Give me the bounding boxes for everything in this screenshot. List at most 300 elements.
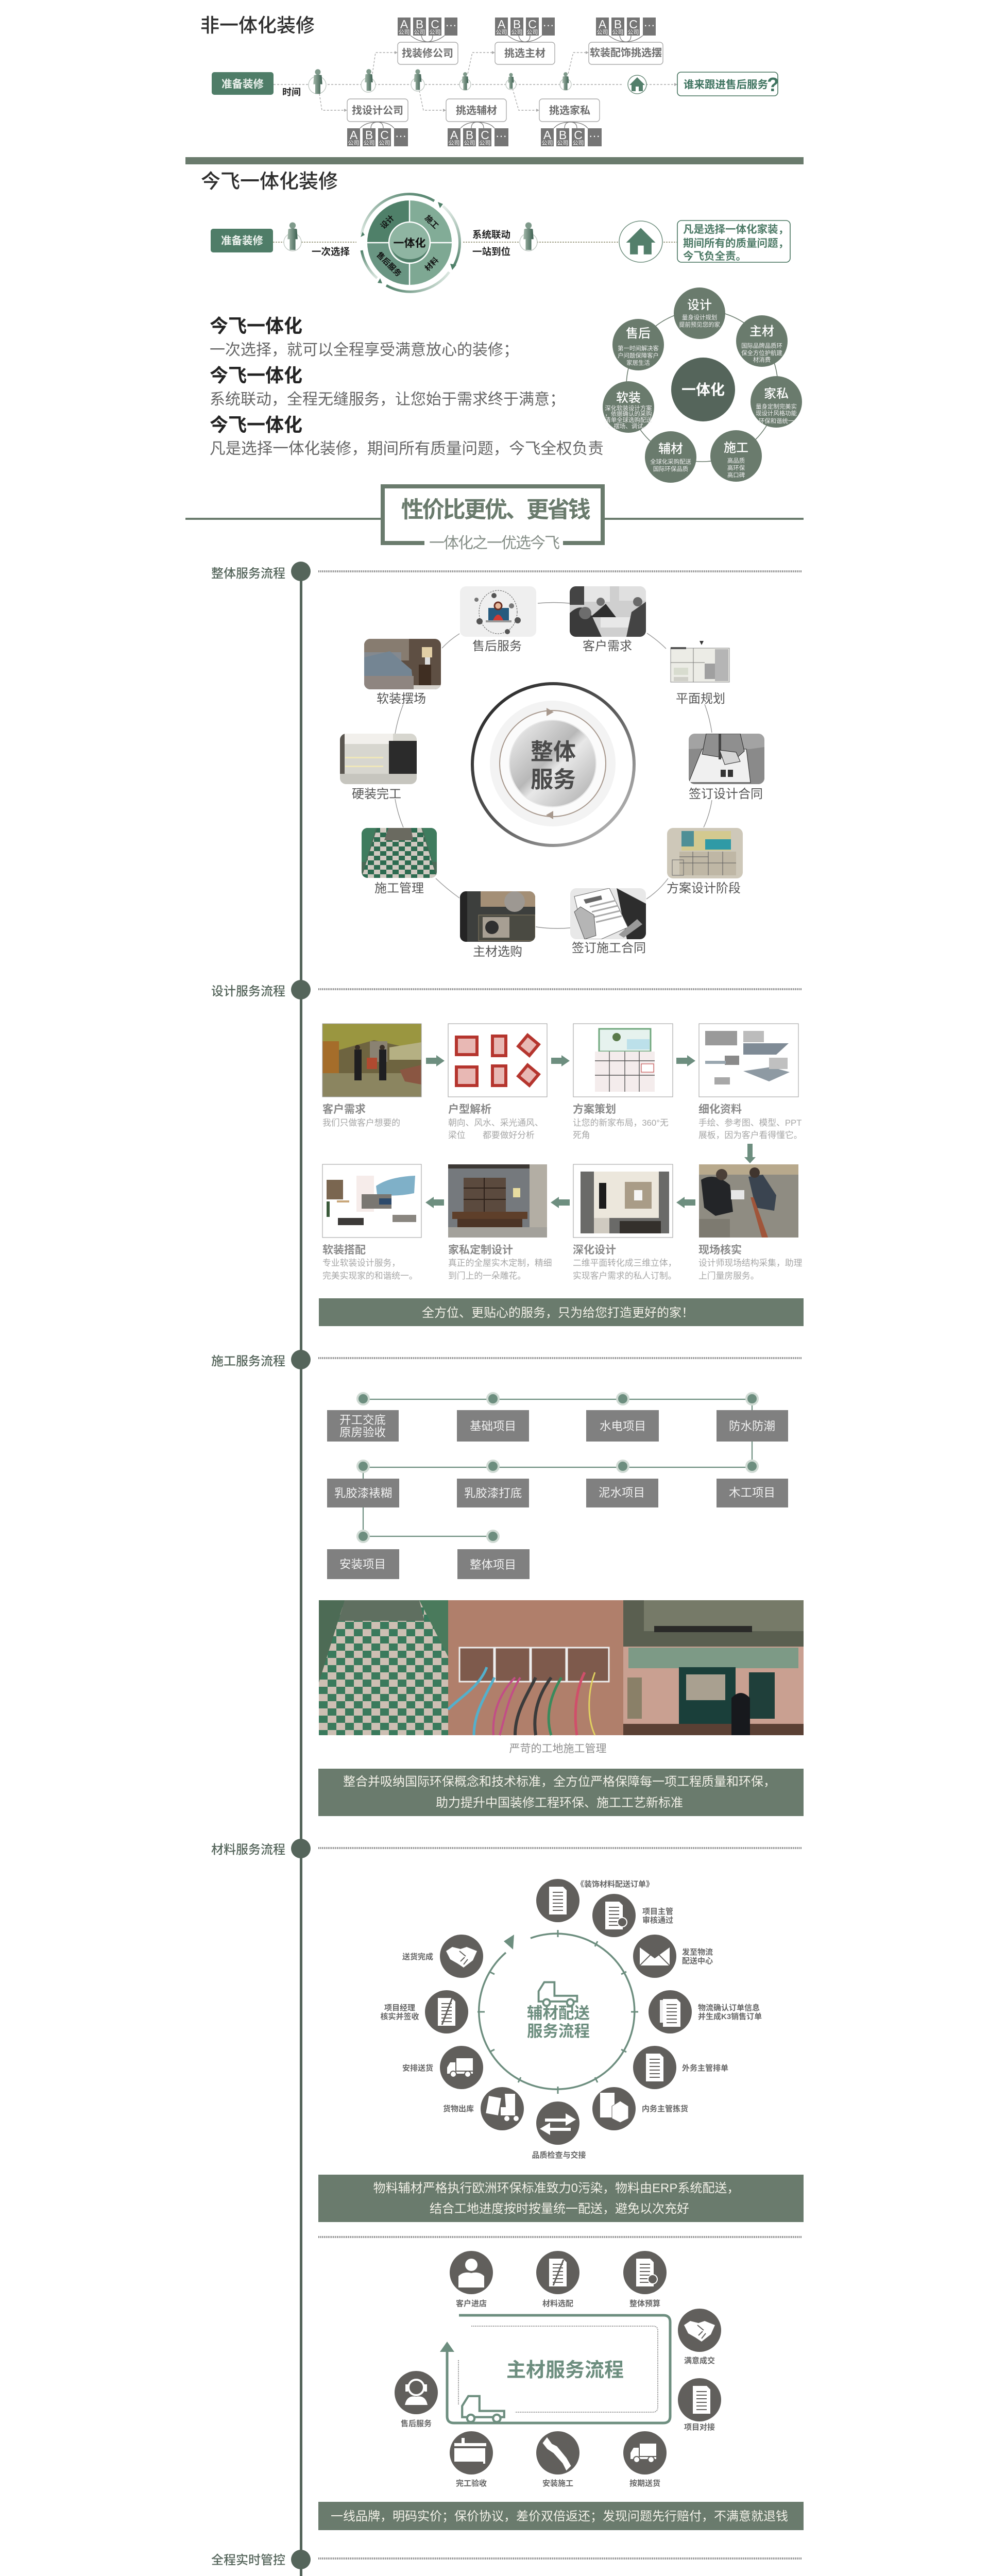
banner: better home xyxy=(319,1298,804,1326)
banner subtitle: 一体化之一优选今飞 xyxy=(429,535,559,552)
step: site verification: 现场核实 xyxy=(698,1244,742,1256)
bubble: construction: 高环保 xyxy=(727,464,745,471)
supplier group: main materials: 公司 xyxy=(511,29,522,36)
route loop xyxy=(447,2315,670,2423)
wheel labels: 售后服务 xyxy=(374,250,403,279)
bubble: furniture: 量身定制完美实 xyxy=(756,403,797,410)
bubble: after-sales xyxy=(612,319,664,370)
step: deepened design: 深化设计 xyxy=(573,1244,616,1256)
supplier group: decoration company: 公司 xyxy=(430,29,441,36)
title: 主材服务流程 xyxy=(506,2360,624,2381)
step: sign construction contract xyxy=(570,888,646,955)
step: construction management: 施工管理 xyxy=(374,882,424,895)
supplier group: furniture: C xyxy=(574,128,583,142)
photo strip: site management xyxy=(319,1600,804,1755)
timeline vertical axis xyxy=(300,571,302,2576)
bubble: soft furnishings: 清单全球选购配送 xyxy=(605,416,652,423)
step box: masonry: 泥水项目 xyxy=(599,1486,645,1499)
centre dial xyxy=(472,684,634,845)
bubble: after-sales: 第一时间解决客 xyxy=(618,345,659,352)
step: scheme planning: 让您的新家布局，360°无 xyxy=(573,1118,669,1128)
step box: soft furnishings xyxy=(589,42,663,64)
step: project manager sign: 核实并签收 xyxy=(380,2012,419,2021)
step: project manager sign: 项目经理 xyxy=(384,2004,415,2012)
process connector lines xyxy=(363,1399,752,1536)
step box: find design company xyxy=(347,99,408,122)
step: design scheme xyxy=(667,828,743,895)
supplier group: decoration company: 公司 xyxy=(414,29,425,36)
step: construction management xyxy=(362,828,437,895)
step: internal supervisor picking: 内务主管拣货 xyxy=(642,2104,688,2113)
centre bubble: 一体化 xyxy=(681,382,725,398)
step: soft styling xyxy=(322,1164,421,1281)
section header xyxy=(211,562,802,581)
bubble: construction: 高口碑 xyxy=(727,471,745,479)
banner: better home: 全方位、更贴心的服务，只为给您打造更好的家！ xyxy=(422,1306,694,1320)
wheel labels: 施工 xyxy=(423,213,440,231)
start box xyxy=(211,229,273,252)
supplier group: design company: A xyxy=(350,128,358,142)
bubble: after-sales: 户问题保障客户 xyxy=(618,352,659,359)
step: total budget: 整体预算 xyxy=(629,2299,660,2308)
arrow xyxy=(551,1197,570,1208)
step: customer needs xyxy=(322,1024,421,1128)
supplier group: furniture: 公司 xyxy=(557,140,569,146)
centre bubble xyxy=(671,358,735,421)
label: system linkage: 系统联动 xyxy=(472,229,510,240)
arrow xyxy=(426,1055,445,1066)
process nodes xyxy=(357,1393,758,1542)
arrow xyxy=(551,1055,570,1066)
bubble: main materials xyxy=(736,315,788,367)
supplier group: main materials: B xyxy=(513,18,521,31)
step: after-sales service xyxy=(460,586,536,653)
step: delivery complete: 送货完成 xyxy=(402,1952,433,1961)
supplier group: main materials xyxy=(495,15,555,42)
banner title: 性价比更优、更省钱 xyxy=(401,497,590,522)
heading: integrated: 今飞一体化装修 xyxy=(201,171,338,193)
step box: carpentry xyxy=(717,1479,788,1507)
bubble: main materials: 主材 xyxy=(749,325,774,338)
step: installation: 安装施工 xyxy=(542,2479,573,2488)
step: project handover: 项目对接 xyxy=(684,2422,715,2432)
step box: soft furnishings: 软装配饰挑选摆 xyxy=(590,47,662,59)
step box: whole project xyxy=(457,1549,530,1579)
icon: person right xyxy=(520,222,537,251)
divider bar xyxy=(185,157,804,164)
bubble: main materials: 保全方位护航建 xyxy=(741,349,782,357)
step: main material selection xyxy=(460,891,535,959)
step box: pick main materials: 挑选主材 xyxy=(504,47,545,59)
icon: home xyxy=(628,75,646,94)
callout: who follows up after-sales xyxy=(677,72,779,96)
callout: who follows up after-sales: 谁来跟进售后服务 xyxy=(684,79,768,91)
section: real-time control xyxy=(211,2550,804,2576)
supplier group: main materials: A xyxy=(498,18,506,31)
step: site verification: 上门量房服务。 xyxy=(698,1271,759,1281)
step: logistics confirm xyxy=(649,1990,762,2033)
callout: responsibility: 凡是选择一体化家装， xyxy=(683,223,789,235)
flow connectors xyxy=(274,51,677,112)
step: after-sales: 售后服务 xyxy=(401,2419,432,2428)
supplier group: furniture: B xyxy=(559,128,567,142)
supplier group: main materials: C xyxy=(528,18,537,31)
step box: pick auxiliary materials: 挑选辅材 xyxy=(456,104,497,116)
step box: pick auxiliary materials xyxy=(446,99,506,122)
ring title: 辅材配送 xyxy=(527,2005,590,2022)
bubble: after-sales: 售后 xyxy=(626,327,651,341)
bubble: auxiliary materials: 辅材 xyxy=(658,442,683,456)
step box: latex primer: 乳胶漆打底 xyxy=(464,1487,522,1500)
step: soft styling: 专业软装设计服务， xyxy=(322,1258,400,1268)
section header xyxy=(211,1839,802,1858)
section header: 整体服务流程 xyxy=(211,567,285,581)
supplier group: design company: C xyxy=(380,128,389,142)
step: after-sales xyxy=(395,2371,438,2428)
label: time: 时间 xyxy=(282,87,301,97)
step box: plumbing and electrics: 水电项目 xyxy=(600,1420,646,1433)
supplier group: soft furnishings: C xyxy=(629,18,638,31)
panel: non-integrated renovation xyxy=(200,15,779,146)
section: construction service flow xyxy=(211,1350,804,1816)
ring title: 服务流程 xyxy=(527,2023,590,2040)
arrow xyxy=(425,1197,444,1208)
step: customer visits xyxy=(450,2251,493,2308)
bubble: furniture: 家私 xyxy=(764,387,789,401)
centre dial: 整体 xyxy=(531,739,576,765)
wheel: one-stop integration xyxy=(361,194,460,292)
step: schedule delivery: 安排送货 xyxy=(402,2063,433,2073)
step: logistics confirm: 并生成K3销售订单 xyxy=(698,2012,762,2021)
supplier group: furniture: 公司 xyxy=(542,140,553,146)
banner: pricing promise: 一线品牌，明码实价；保价协议，差价双倍返还；发现问题先行赔付，不满意就退钱 xyxy=(331,2510,788,2523)
step: soft furnishing setup: 软装摆场 xyxy=(377,692,426,706)
start box: 准备装修 xyxy=(221,78,264,90)
step box: waterproofing xyxy=(717,1410,788,1442)
bubble: main materials: 材消费 xyxy=(753,356,771,363)
step: deepened design: 二维平面转化成三维立体， xyxy=(573,1258,676,1268)
step: customer needs: 客户需求 xyxy=(583,639,632,653)
step box: waterproofing: 防水防潮 xyxy=(729,1420,775,1433)
supplier group: soft furnishings: B xyxy=(614,18,622,31)
bubble: design: 量身设计规划 xyxy=(682,314,717,321)
step: soft furnishing setup xyxy=(364,639,441,706)
photo caption: 严苛的工地施工管理 xyxy=(509,1743,607,1755)
section banner: better value xyxy=(185,486,804,552)
step box: foundation: 基础项目 xyxy=(470,1420,516,1433)
icon: large home xyxy=(619,221,662,262)
text block: integrated promise xyxy=(210,315,604,457)
photo: ceiling finish xyxy=(623,1600,804,1735)
bubble: construction: 施工 xyxy=(724,441,748,455)
section: design service flow xyxy=(211,980,804,1326)
supplier group: furniture: 公司 xyxy=(573,140,584,146)
step box: latex mounting xyxy=(327,1479,399,1507)
step: quality check handover: 品质检查与交接 xyxy=(532,2150,586,2160)
step: send to logistics: 发至物流 xyxy=(682,1947,713,1957)
supplier group: design company: 公司 xyxy=(364,140,375,146)
step: floor plan xyxy=(669,639,732,706)
supplier group: decoration company: 公司 xyxy=(399,29,410,36)
callout: responsibility: 今飞负全责。 xyxy=(683,250,746,262)
supplier group: soft furnishings: A xyxy=(599,18,607,31)
step: project manager sign xyxy=(380,1990,468,2033)
step: material selection xyxy=(536,2251,579,2308)
step: field supervisor schedule xyxy=(633,2046,728,2089)
step box: pick main materials xyxy=(495,42,555,64)
bubble: design: 设计 xyxy=(687,298,712,312)
banner: eco materials: 物料辅材严格执行欧洲环保标准致力0污染，物料由ERP系统配送， xyxy=(373,2181,739,2195)
bubble: furniture: 环保和谐统一 xyxy=(759,417,794,425)
step: layout analysis: 朝向、风水、采光通风、 xyxy=(448,1118,543,1128)
step box: installation xyxy=(327,1549,399,1579)
bubble: auxiliary materials: 全球化采购配送 xyxy=(650,458,691,465)
step: detailed documents: 细化资料 xyxy=(698,1104,742,1115)
step: field supervisor schedule: 外务主管排单 xyxy=(682,2063,728,2073)
step: customer needs xyxy=(570,586,646,653)
arrow: down xyxy=(744,1144,756,1163)
photo: wiring box xyxy=(448,1600,623,1735)
step: soft styling: 完美实现家的和谐统一。 xyxy=(322,1271,418,1281)
step: delivery order xyxy=(536,1879,654,1922)
step box: latex primer xyxy=(457,1479,529,1507)
step: detailed documents: 手绘、参考图、模型、PPT xyxy=(698,1118,802,1128)
step: delivery complete xyxy=(402,1935,483,1978)
step: customer needs: 我们只做客户想要的 xyxy=(322,1118,400,1128)
step: send to logistics: 配送中心 xyxy=(682,1957,713,1965)
panel: integrated renovation xyxy=(201,171,790,292)
step box: pick furniture xyxy=(539,99,600,122)
supplier group: main materials: … xyxy=(542,15,554,29)
step box: whole project: 整体项目 xyxy=(470,1558,516,1571)
step: logistics confirm: 物流确认订单信息 xyxy=(698,2003,760,2012)
label: one choice: 一次选择 xyxy=(312,246,350,257)
wheel labels: 设计 xyxy=(379,214,396,231)
supplier group: design company: 公司 xyxy=(379,140,390,146)
wheel centre xyxy=(389,222,430,263)
step: internal supervisor picking xyxy=(592,2087,688,2130)
supplier group: auxiliary materials: 公司 xyxy=(448,140,459,146)
step box: carpentry: 木工项目 xyxy=(729,1486,775,1499)
banner: eco materials xyxy=(318,2175,804,2222)
bubble: soft furnishings: 、摆场、调试。 xyxy=(608,422,649,430)
step: customer visits: 客户进店 xyxy=(456,2299,487,2308)
banner: environmental standards xyxy=(318,1769,804,1816)
step: deal closed xyxy=(678,2309,721,2365)
supplier group: auxiliary materials: A xyxy=(450,128,458,142)
step: acceptance xyxy=(450,2431,493,2488)
step: delivery order: 《装饰材料配送订单》 xyxy=(576,1879,654,1889)
supplier group: soft furnishings: 公司 xyxy=(627,29,639,36)
step: delivery on schedule: 按期送货 xyxy=(629,2479,660,2488)
supplier group: decoration company: B xyxy=(416,18,423,31)
bubble: soft furnishings: 深化软装设计方案 xyxy=(605,404,652,412)
step: hard finish complete xyxy=(340,734,417,801)
supplier group: auxiliary materials: 公司 xyxy=(464,140,475,146)
step box: masonry xyxy=(586,1479,658,1507)
bubble: construction: 高品质 xyxy=(727,457,745,464)
step: custom furniture: 到门上的一朵雕花。 xyxy=(448,1271,526,1281)
step: goods out: 货物出库 xyxy=(443,2104,474,2113)
step box: latex mounting: 乳胶漆裱糊 xyxy=(334,1487,392,1500)
supplier group: main materials: 公司 xyxy=(526,29,538,36)
supplier group: auxiliary materials xyxy=(448,122,508,146)
wheel labels: 材料 xyxy=(423,256,440,273)
callout: responsibility xyxy=(677,221,790,262)
section header: 施工服务流程 xyxy=(211,1354,285,1368)
step: schedule delivery xyxy=(402,2046,483,2089)
step: deepened design: 实现客户需求的私人订制。 xyxy=(573,1271,676,1281)
bubble: soft furnishings: ，依据确认的采购 xyxy=(605,410,652,417)
step: scheme planning xyxy=(573,1024,673,1140)
step: custom furniture: 真正的全屋实木定制，精细 xyxy=(448,1258,552,1268)
diagram: integration ring xyxy=(603,287,802,483)
step: floor plan: 平面规划 xyxy=(676,692,725,706)
connectors xyxy=(273,242,677,243)
supplier group: design company: … xyxy=(395,126,407,140)
banner: environmental standards: 助力提升中国装修工程环保、施工工艺新标准 xyxy=(436,1796,683,1810)
banner: eco materials: 结合工地进度按时按量统一配送，避免以次充好 xyxy=(430,2202,689,2216)
callout: who follows up after-sales: ? xyxy=(767,74,779,96)
supplier group: soft furnishings xyxy=(596,15,656,42)
section: material service flow xyxy=(211,1839,804,2530)
step box: find design company: 找设计公司 xyxy=(352,105,403,116)
supplier group: furniture xyxy=(541,122,602,146)
step: project handover xyxy=(678,2378,721,2432)
step: detailed documents: 展板，因为客户看得懂它。 xyxy=(698,1130,802,1140)
step: site verification: 设计师现场结构采集，助理 xyxy=(698,1258,803,1268)
step box: plumbing and electrics xyxy=(586,1410,659,1442)
supplier group: auxiliary materials: B xyxy=(466,128,473,142)
section header xyxy=(211,2550,802,2569)
text block: integrated promise: 系统联动，全程无缝服务，让您始于需求终于满意； xyxy=(210,391,565,408)
photo: floor protection xyxy=(319,1600,448,1735)
supplier group: soft furnishings: … xyxy=(643,15,655,29)
supplier group: design company: B xyxy=(365,128,373,142)
step: delivery on schedule xyxy=(623,2431,667,2488)
supplier group: soft furnishings: 公司 xyxy=(612,29,623,36)
step: layout analysis: 梁位 都要做好分析 xyxy=(448,1130,535,1140)
wheel centre: 一体化 xyxy=(394,238,425,249)
step: main material selection: 主材选购 xyxy=(473,945,522,959)
step: sign construction contract: 签订施工合同 xyxy=(572,941,646,955)
step: design scheme: 方案设计阶段 xyxy=(667,882,741,895)
step: layout analysis xyxy=(448,1024,547,1140)
banner: pricing promise xyxy=(318,2502,804,2530)
supplier group: auxiliary materials: C xyxy=(481,128,489,142)
bubble: after-sales: 家居生活 xyxy=(626,359,650,366)
step: goods out xyxy=(443,2087,524,2130)
supplier group: soft furnishings: 公司 xyxy=(596,29,608,36)
icon: truck xyxy=(462,2396,504,2422)
step: hard finish complete: 硬装完工 xyxy=(352,787,401,801)
centre dial: 服务 xyxy=(531,767,576,792)
step: sign design contract xyxy=(689,734,764,801)
step: detailed documents xyxy=(698,1024,802,1140)
supplier group: design company: 公司 xyxy=(348,140,360,146)
supplier group: decoration company: … xyxy=(445,15,457,29)
step box: foundation xyxy=(457,1410,529,1442)
step: customer needs: 客户需求 xyxy=(322,1103,366,1115)
wheel labels xyxy=(374,213,440,279)
delivery ring xyxy=(478,1930,638,2094)
step: manager approval xyxy=(592,1894,673,1937)
callout: responsibility: 期间所有的质量问题， xyxy=(683,238,789,249)
section header: 全程实时管控 xyxy=(211,2553,285,2567)
step box: site handover: 原房验收 xyxy=(339,1426,386,1439)
bubble: soft furnishings xyxy=(603,381,654,433)
supplier group: design company xyxy=(347,122,408,146)
supplier group: furniture: … xyxy=(588,126,601,140)
text block: integrated promise: 一次选择，就可以全程享受满意放心的装修； xyxy=(210,342,519,359)
supplier group: decoration company: A xyxy=(400,18,408,31)
supplier group: main materials: 公司 xyxy=(496,29,507,36)
icon: person left xyxy=(284,222,301,251)
bubble: furniture xyxy=(751,376,802,428)
step box: site handover xyxy=(327,1410,399,1442)
step: acceptance: 完工验收 xyxy=(456,2479,487,2488)
supplier group: decoration company: C xyxy=(431,18,439,31)
bubble: auxiliary materials: 国际环保品质 xyxy=(653,465,688,472)
connecting arcs xyxy=(395,603,712,928)
wheel outer arrows xyxy=(361,194,460,292)
step: installation xyxy=(536,2431,579,2488)
step: material selection: 材料选配 xyxy=(542,2299,573,2308)
step: custom furniture: 家私定制设计 xyxy=(448,1244,513,1256)
icon: people along timeline xyxy=(309,69,571,94)
step: manager approval: 审核通过 xyxy=(642,1916,673,1925)
start box xyxy=(212,72,274,95)
step box: site handover: 开工交底 xyxy=(339,1414,386,1427)
step: custom furniture xyxy=(448,1164,552,1281)
step: scheme planning: 方案策划 xyxy=(573,1103,616,1115)
section header: 材料服务流程 xyxy=(211,1843,285,1857)
step: quality check handover xyxy=(532,2102,586,2160)
wheel quadrants xyxy=(367,200,452,285)
route arrowhead xyxy=(440,2342,454,2352)
step: total budget xyxy=(623,2251,667,2308)
text block: integrated promise: 今飞一体化 xyxy=(210,365,302,386)
text block: integrated promise: 今飞一体化 xyxy=(210,315,302,336)
bubble: auxiliary materials xyxy=(645,431,696,483)
start box: 准备装修 xyxy=(221,235,263,247)
bubble: soft furnishings: 软装 xyxy=(616,391,641,405)
section: overall service flow xyxy=(211,562,802,959)
step box: installation: 安装项目 xyxy=(339,1558,386,1571)
banner: environmental standards: 整合并吸纳国际环保概念和技术标准，全方位严格保障每一项工程质量和环保， xyxy=(343,1775,776,1789)
inner dotted route xyxy=(458,2326,658,2412)
step: deal closed: 满意成交 xyxy=(684,2356,715,2365)
section header xyxy=(211,1350,802,1369)
label: one stop: 一站到位 xyxy=(472,246,510,257)
bubble: design xyxy=(674,287,725,339)
ring title xyxy=(527,1982,590,2040)
heading: non-integrated: 非一体化装修 xyxy=(200,15,315,36)
supplier group: auxiliary materials: … xyxy=(496,126,507,140)
text block: integrated promise: 凡是选择一体化装修，期间所有质量问题，今飞全权负责 xyxy=(210,440,604,457)
step box: pick furniture: 挑选家私 xyxy=(549,104,590,116)
step: deepened design xyxy=(573,1164,676,1281)
section header xyxy=(211,980,802,999)
text block: integrated promise: 今飞一体化 xyxy=(210,414,302,435)
step: layout analysis: 户型解析 xyxy=(448,1104,491,1115)
bubble: furniture: 现设计风格功能 xyxy=(756,410,797,417)
panel: main material service flow xyxy=(395,2251,721,2488)
supplier group: furniture: A xyxy=(543,128,552,142)
supplier group: auxiliary materials: 公司 xyxy=(479,140,490,146)
arrow xyxy=(676,1055,695,1066)
section header: 设计服务流程 xyxy=(211,985,285,998)
